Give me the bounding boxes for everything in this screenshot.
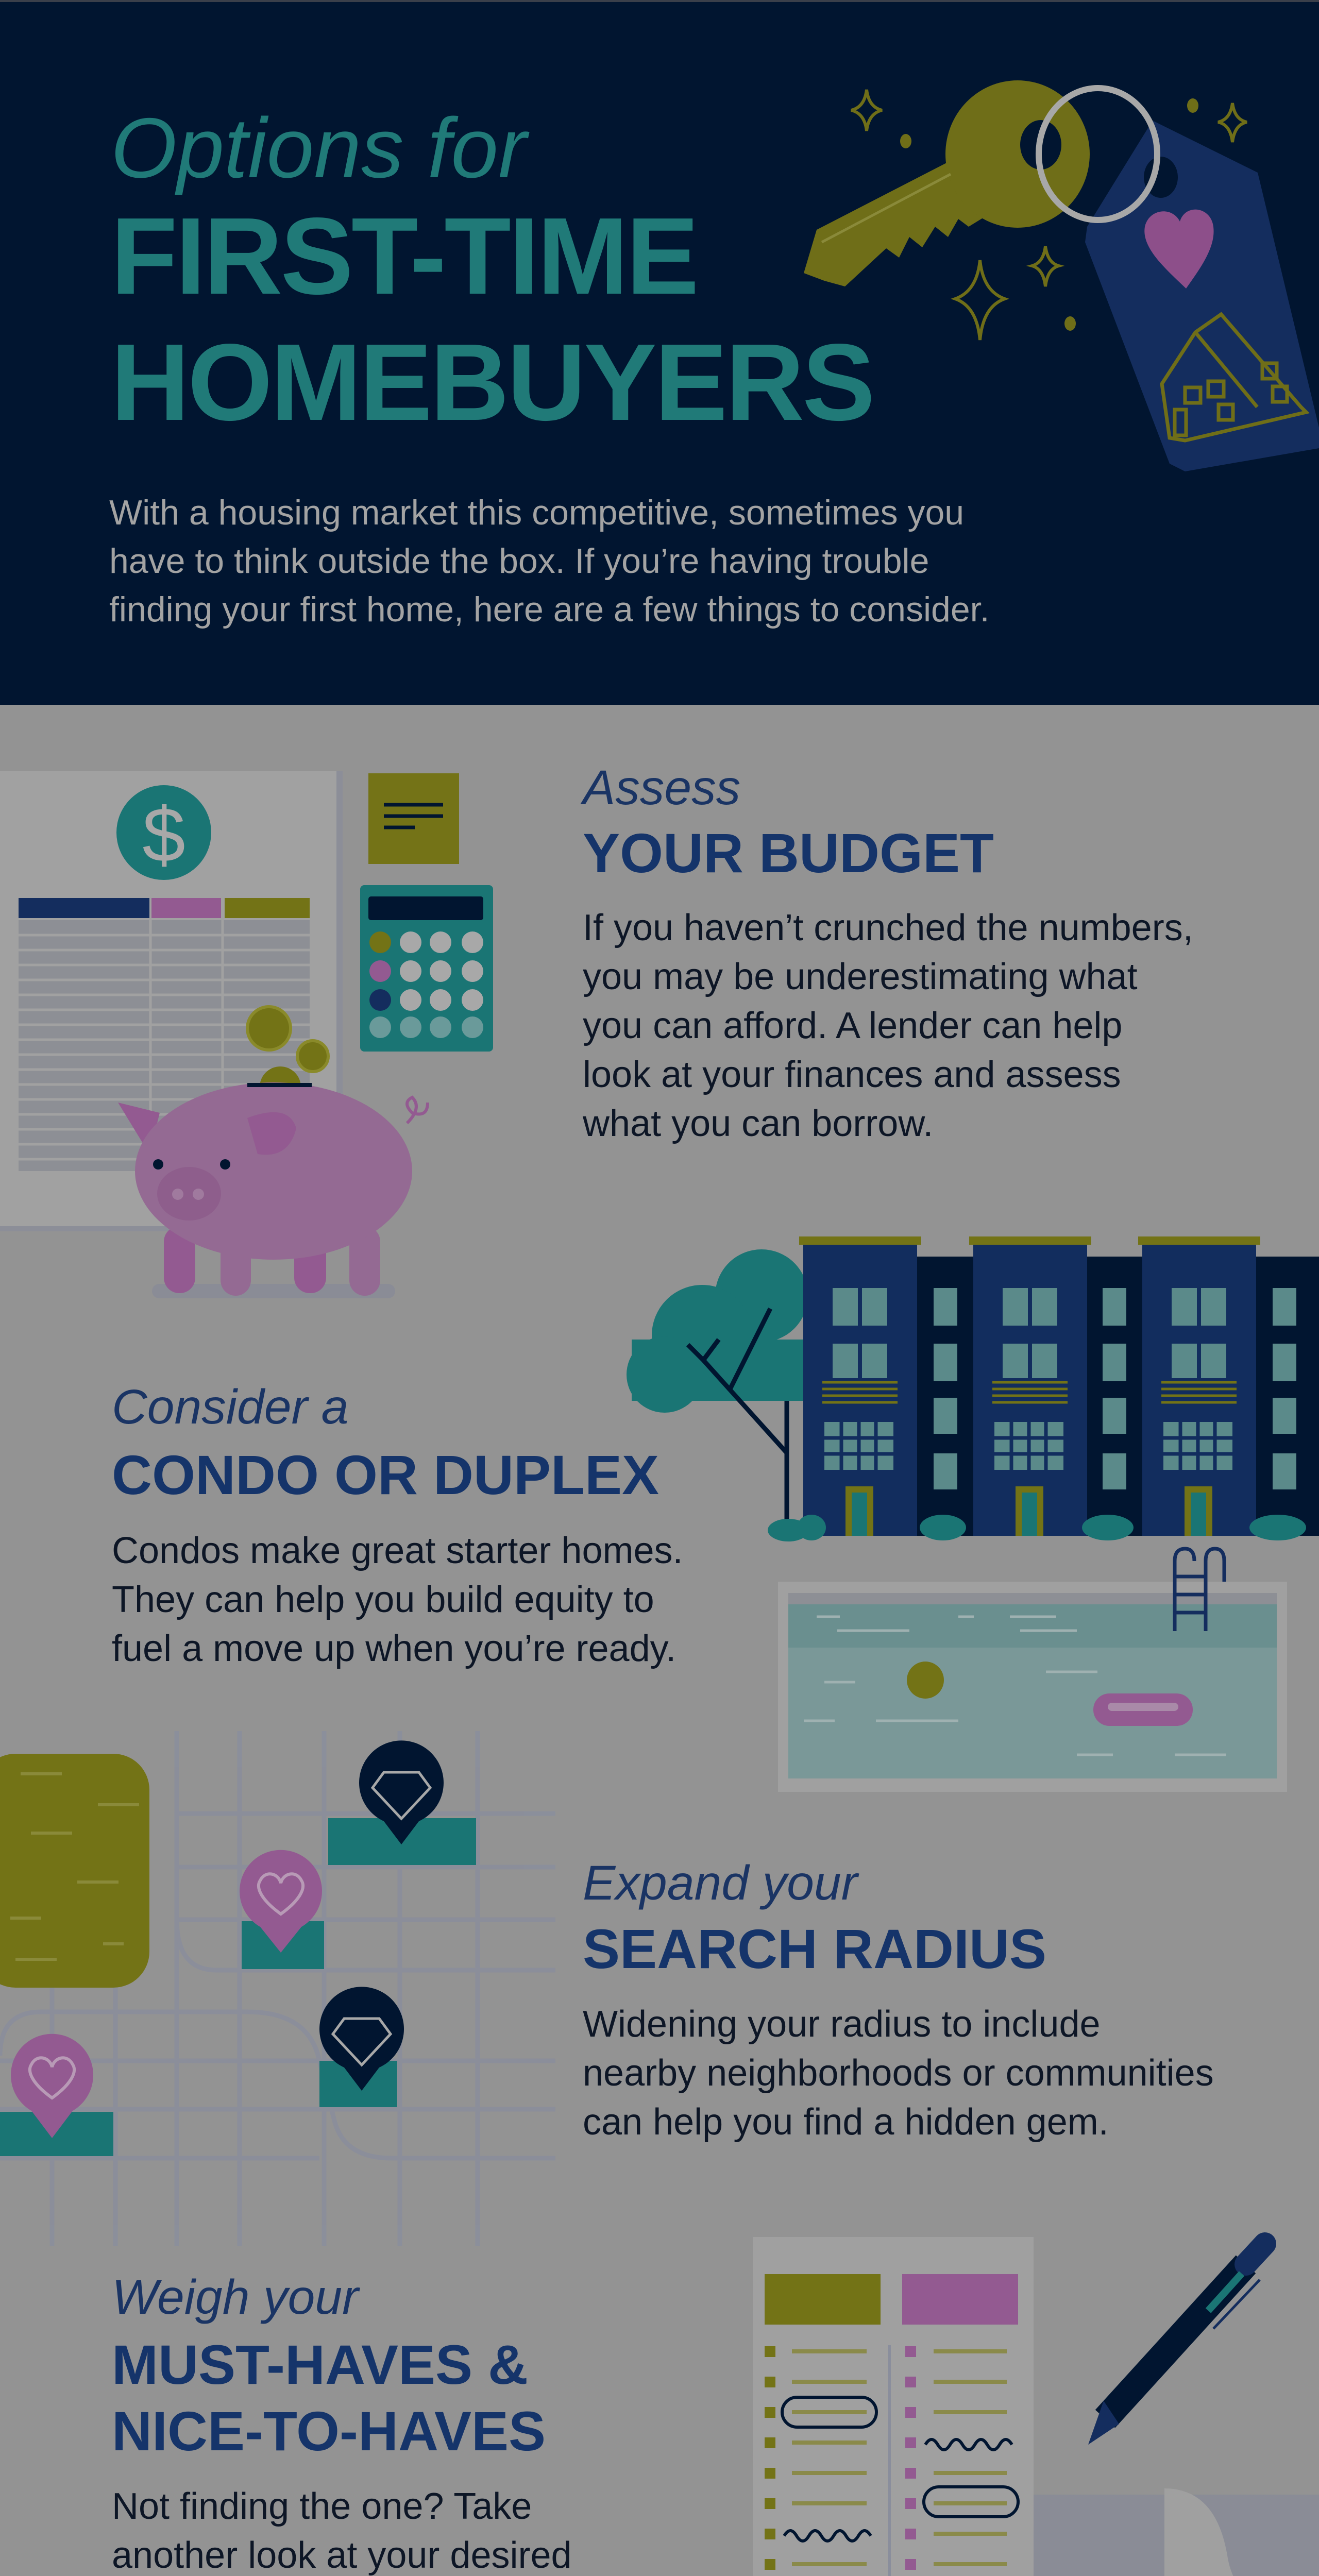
section: budget text: you may be underestimating what xyxy=(583,956,1138,997)
icon: key with house tag xyxy=(804,80,1319,471)
illustration: condo buildings with tree xyxy=(627,1236,1319,1541)
section: search radius text: can help you find a hidden gem. xyxy=(583,2102,1109,2143)
illustration: pool xyxy=(778,1549,1287,1792)
section: must-haves text: Not finding the one? Take xyxy=(112,2486,532,2527)
section: search radius text xyxy=(583,1856,1214,2143)
illustration: map with pins xyxy=(0,1731,555,2246)
section: budget text: look at your finances and assess xyxy=(583,1054,1121,1095)
section: condo text: They can help you build equity to xyxy=(112,1579,654,1620)
intro text: With a housing market this competitive, sometimes you xyxy=(109,493,964,532)
section: must-haves text: MUST-HAVES & xyxy=(112,2333,528,2396)
section: must-haves text xyxy=(112,2270,572,2576)
section: budget text xyxy=(580,760,1193,1144)
section: budget text: If you haven’t crunched the numbers, xyxy=(583,907,1193,948)
section: condo text: CONDO OR DUPLEX xyxy=(112,1444,659,1506)
section: search radius text: nearby neighborhoods or communities xyxy=(583,2053,1214,2094)
illustration: budget sheet, calculator, piggy bank xyxy=(0,771,493,1298)
section: budget text: you can afford. A lender can help xyxy=(583,1005,1122,1046)
intro text: have to think outside the box. If you’re having trouble xyxy=(109,541,929,581)
section: search radius text: SEARCH RADIUS xyxy=(583,1918,1046,1980)
section: budget text: what you can borrow. xyxy=(583,1103,933,1144)
title xyxy=(111,100,873,443)
section: condo text: Condos make great starter homes. xyxy=(112,1530,683,1571)
intro text xyxy=(109,493,989,629)
section: must-haves text: Weigh your xyxy=(112,2270,359,2325)
intro text: finding your first home, here are a few things to consider. xyxy=(109,590,989,629)
section: condo text xyxy=(112,1380,683,1669)
section: condo text: fuel a move up when you’re ready. xyxy=(112,1628,676,1669)
section: budget text: YOUR BUDGET xyxy=(583,822,994,884)
title: Options for xyxy=(111,100,527,195)
section: search radius text: Widening your radius to include xyxy=(583,2004,1101,2045)
title: HOMEBUYERS xyxy=(111,321,873,443)
section: search radius text: Expand your xyxy=(583,1856,857,1910)
section: budget text: Assess xyxy=(583,760,740,815)
illustration: budget sheet, calculator, piggy bank: $ xyxy=(142,791,185,878)
section: must-haves text: NICE-TO-HAVES xyxy=(112,2400,546,2462)
section: condo text: Consider a xyxy=(112,1380,348,1434)
section: must-haves text: another look at your desired xyxy=(112,2535,572,2576)
illustration: checklist scroll and pen xyxy=(753,2237,1319,2576)
title: FIRST-TIME xyxy=(111,195,697,317)
